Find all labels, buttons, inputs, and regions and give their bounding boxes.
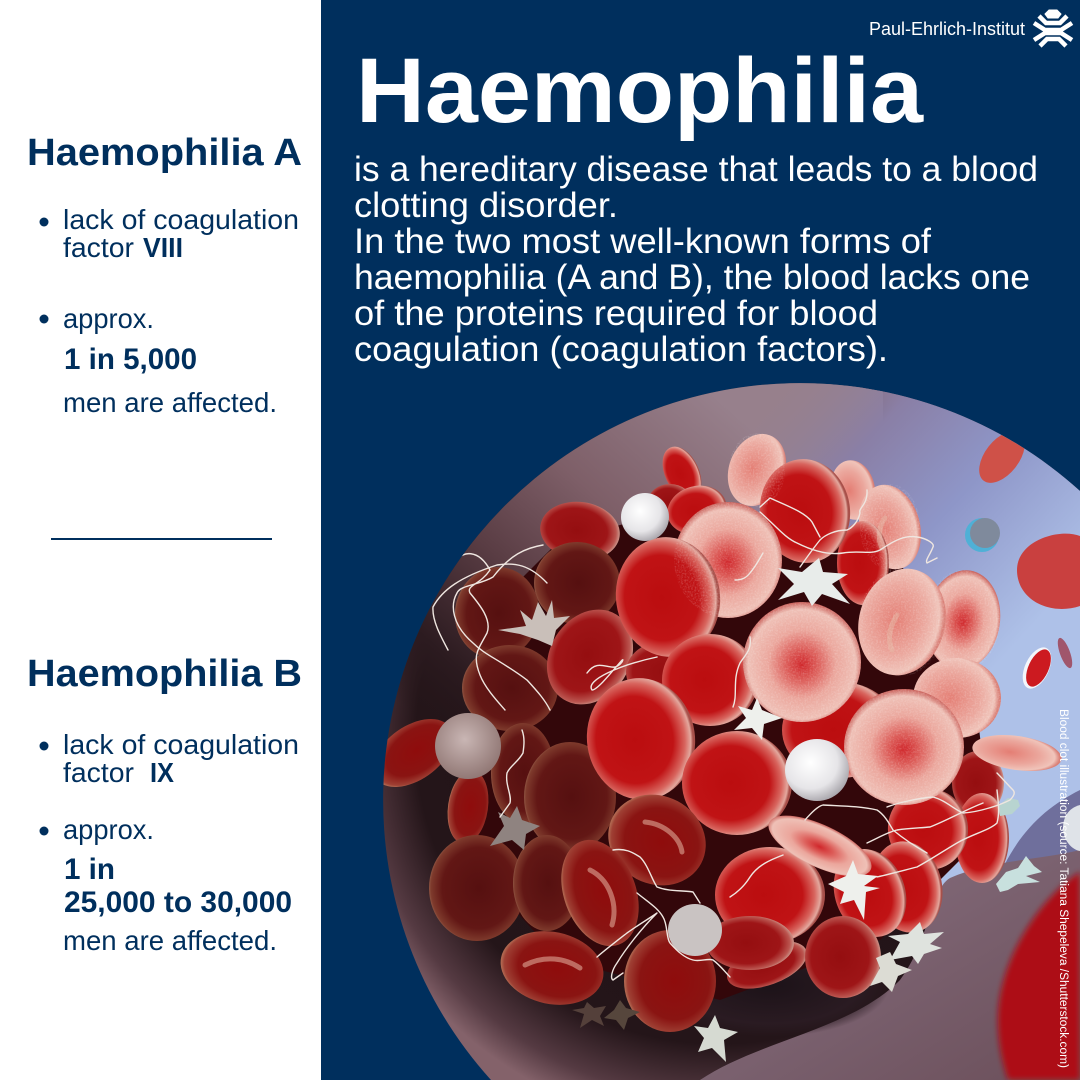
bullet: lack of factor VIII: factor	[63, 232, 134, 263]
image credit: Blood clot illustration (source: Tatiana Shepeleva /Shutterstock.com)	[1057, 709, 1069, 1068]
vessel background	[383, 383, 1080, 1080]
panel: Haemophilia B	[27, 653, 302, 956]
bullet: 1 in 25,000 to 30,000 men affected: approx.	[63, 814, 154, 845]
bullet: lack of factor IX: IX	[150, 757, 174, 788]
left white panel	[0, 0, 321, 1080]
bullet: 1 in 25,000 to 30,000 men affected: men are affected.	[63, 925, 277, 956]
right navy panel	[321, 0, 1080, 1080]
bullet: 1 in 5,000 men affected: approx.	[63, 303, 154, 334]
dark interior of cluster	[470, 510, 985, 1000]
pale highlights on cells	[525, 518, 897, 968]
bullet: 1 in 5,000 men affected: 1 in 5,000	[64, 343, 197, 376]
bullet: 1 in 25,000 to 30,000 men affected: 25,000 to 30,000	[64, 886, 292, 919]
panel: Haemophilia A	[27, 132, 302, 418]
bullet: lack of factor VIII	[40, 204, 299, 263]
intro paragraph: coagulation (coagulation factors).	[354, 330, 888, 369]
heading: Haemophilia B: Haemophilia B	[27, 653, 302, 695]
logo: Paul-Ehrlich-Institut: Paul-Ehrlich-Institut	[869, 19, 1025, 39]
red blood cell cluster	[361, 426, 1064, 1032]
bullet: lack of factor VIII: VIII	[143, 232, 183, 263]
intro paragraph: of the proteins required for blood	[354, 294, 878, 333]
intro paragraph: clotting disorder.	[354, 186, 618, 225]
intro paragraph: is a hereditary disease that leads to a blood	[354, 150, 1038, 189]
logo: Paul-Ehrlich-Institut	[869, 10, 1072, 46]
divider	[51, 538, 272, 540]
bullet: lack of factor IX	[40, 729, 299, 788]
bullet: lack of factor IX: lack of coagulation	[63, 729, 299, 760]
surface grain on cells	[674, 433, 1001, 805]
blood clot illustration	[361, 383, 1080, 1080]
intro paragraph: haemophilia (A and B), the blood lacks one	[354, 258, 1030, 297]
bullet: lack of factor VIII: lack of coagulation	[63, 204, 299, 235]
bullet: lack of factor IX: factor	[63, 757, 134, 788]
white blood cells	[435, 493, 849, 956]
background floating cells	[965, 423, 1080, 1080]
intro paragraph	[354, 150, 1038, 369]
heading: Haemophilia A: Haemophilia A	[27, 132, 302, 174]
title: Haemophilia	[356, 40, 924, 142]
bullet: 1 in 25,000 to 30,000 men affected	[40, 814, 292, 956]
fibrin strands	[433, 490, 1014, 980]
platelets	[490, 558, 1042, 1062]
bullet: 1 in 5,000 men affected	[40, 303, 277, 418]
bullet: 1 in 5,000 men affected: men are affected.	[63, 387, 277, 418]
intro paragraph: In the two most well-known forms of	[354, 222, 931, 261]
bullet: 1 in 25,000 to 30,000 men affected: 1 in	[64, 853, 115, 886]
